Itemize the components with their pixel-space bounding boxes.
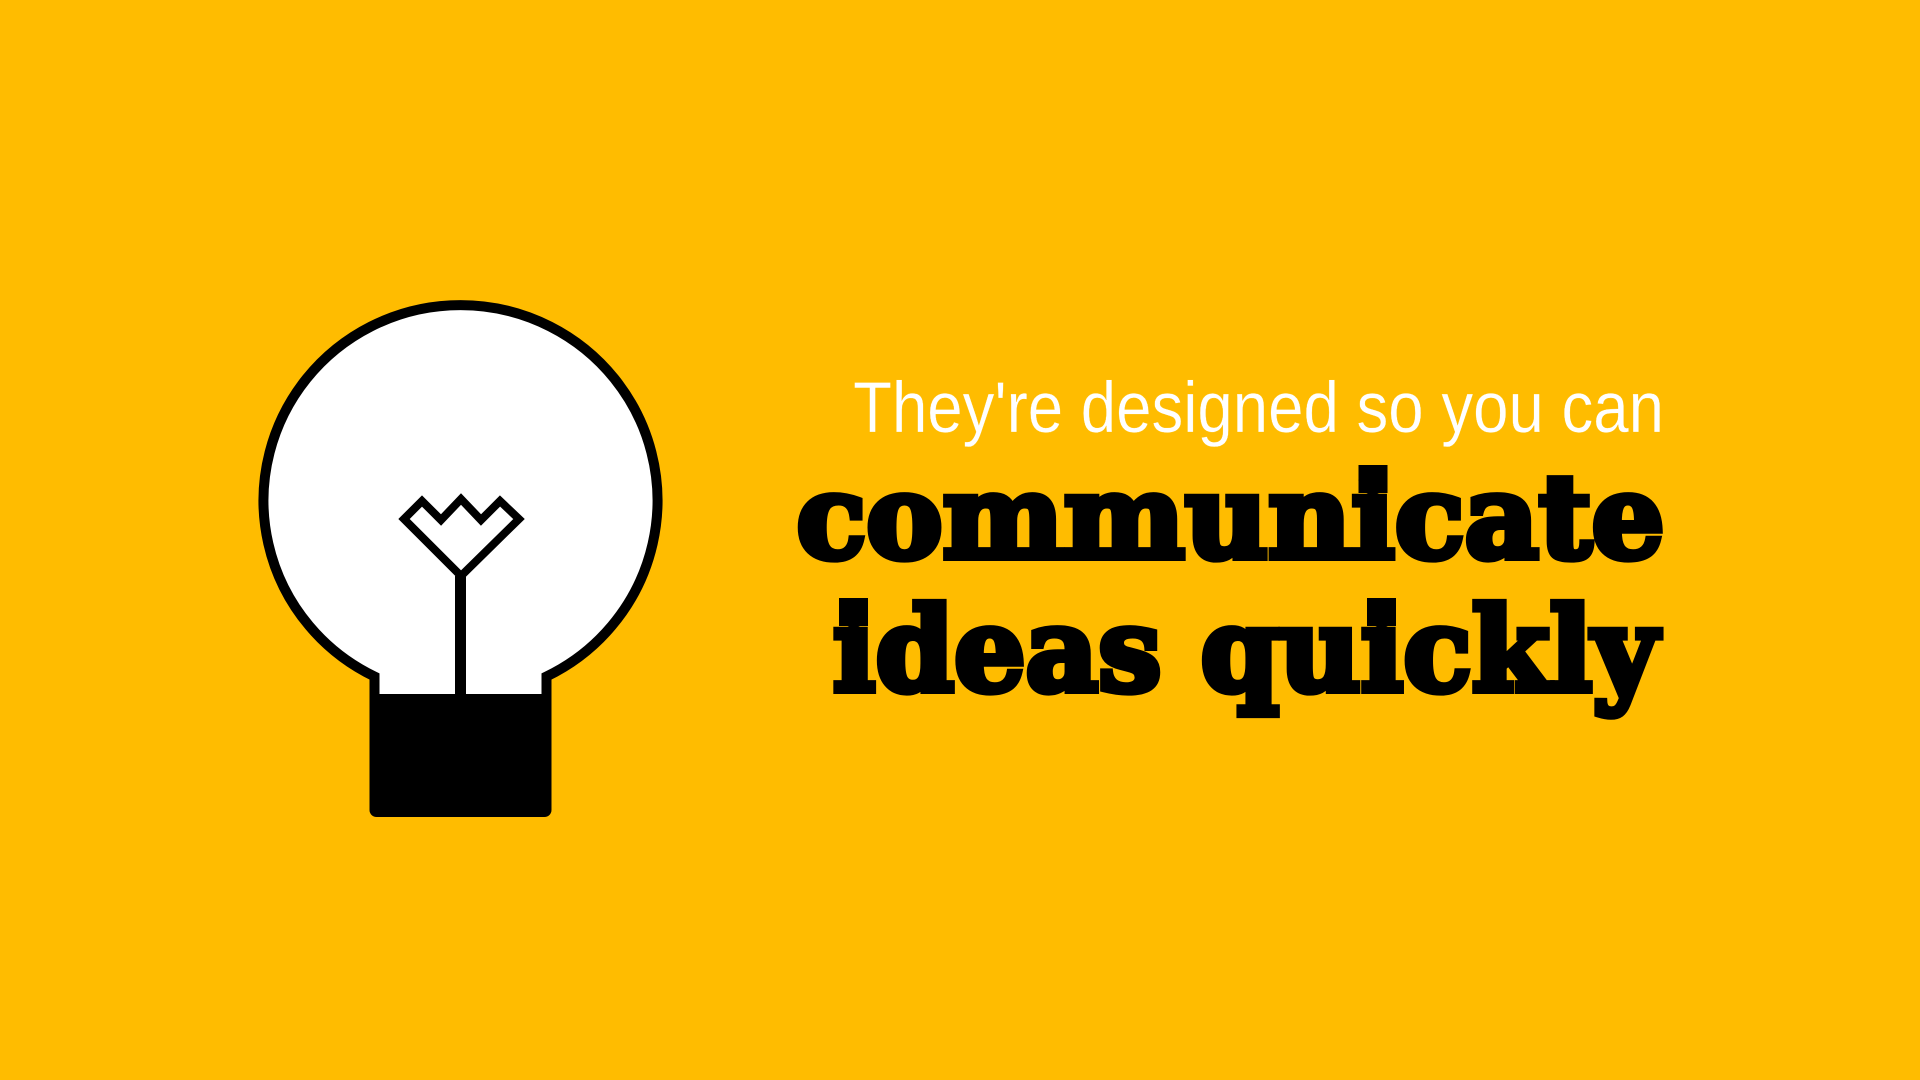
headline line one: communicate [797, 450, 1664, 586]
text block: message [797, 368, 1664, 718]
bulb glass [263, 305, 657, 790]
bulb base [370, 694, 552, 817]
icon: light bulb [263, 305, 657, 817]
intro line: They're designed so you can [853, 368, 1664, 448]
filament [404, 499, 519, 576]
filament stem [455, 576, 466, 696]
headline line two: ideas quickly [833, 582, 1661, 718]
